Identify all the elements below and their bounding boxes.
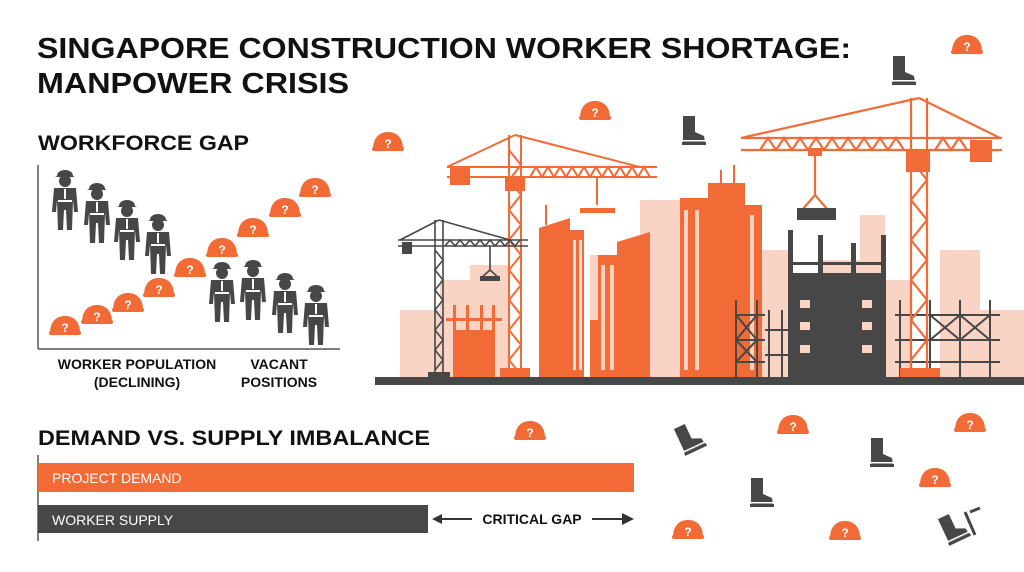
vacant hardhats: ?	[311, 183, 319, 197]
arrow: critical gap	[432, 511, 634, 527]
vacant hardhats: ?	[186, 263, 194, 277]
vacant hardhats: ?	[218, 243, 226, 257]
orange crane right	[741, 98, 1002, 380]
ground	[375, 377, 1024, 385]
boots	[673, 56, 980, 546]
title	[37, 33, 851, 100]
bar: worker supply: WORKER SUPPLY	[52, 512, 174, 528]
dark building	[788, 230, 886, 380]
vacant hardhats: ?	[155, 283, 163, 297]
arrow: critical gap: CRITICAL GAP	[482, 511, 582, 527]
bar: project demand	[38, 463, 634, 492]
orange buildings	[446, 165, 762, 380]
floating hats & boots: ?	[931, 473, 939, 487]
orange crane left	[447, 135, 657, 380]
bar chart: demand vs supply	[38, 455, 634, 541]
floating hats & boots: ?	[526, 426, 534, 440]
vacant hardhats: ?	[61, 321, 69, 335]
scaffolding	[736, 300, 1000, 380]
floating hats & boots: ?	[789, 420, 797, 434]
floating hats & boots	[372, 35, 986, 540]
floating hats & boots: ?	[384, 137, 392, 151]
chart labels: WORKER POPULATION	[58, 356, 216, 372]
title: MANPOWER CRISIS	[37, 68, 349, 100]
vacant hardhats: ?	[93, 310, 101, 324]
chart labels: VACANT	[250, 356, 308, 372]
windows	[573, 210, 754, 370]
floating hats & boots: ?	[591, 106, 599, 120]
heading: demand vs supply: DEMAND VS. SUPPLY IMBALANCE	[38, 427, 430, 450]
floating hats & boots: ?	[966, 418, 974, 432]
vacant hardhats: ?	[124, 298, 132, 312]
heading: workforce gap: WORKFORCE GAP	[38, 132, 249, 155]
bar: project demand: PROJECT DEMAND	[52, 470, 182, 486]
vacant hardhats	[49, 178, 331, 335]
vacant hardhats: ?	[281, 203, 289, 217]
bar: worker supply	[38, 505, 428, 533]
floating hats & boots: ?	[684, 525, 692, 539]
chart labels	[58, 356, 317, 390]
workers declining	[52, 170, 329, 345]
light background buildings	[400, 200, 1024, 380]
floating hats & boots: ?	[963, 40, 971, 54]
title: SINGAPORE CONSTRUCTION WORKER SHORTAGE:	[37, 33, 851, 65]
floating hats & boots: ?	[841, 526, 849, 540]
chart labels: (DECLINING)	[94, 374, 180, 390]
dark crane small	[398, 220, 528, 380]
vacant hardhats: ?	[249, 223, 257, 237]
chart labels: POSITIONS	[241, 374, 317, 390]
chart: workforce gap	[38, 165, 340, 349]
skyline illustration	[375, 98, 1024, 385]
